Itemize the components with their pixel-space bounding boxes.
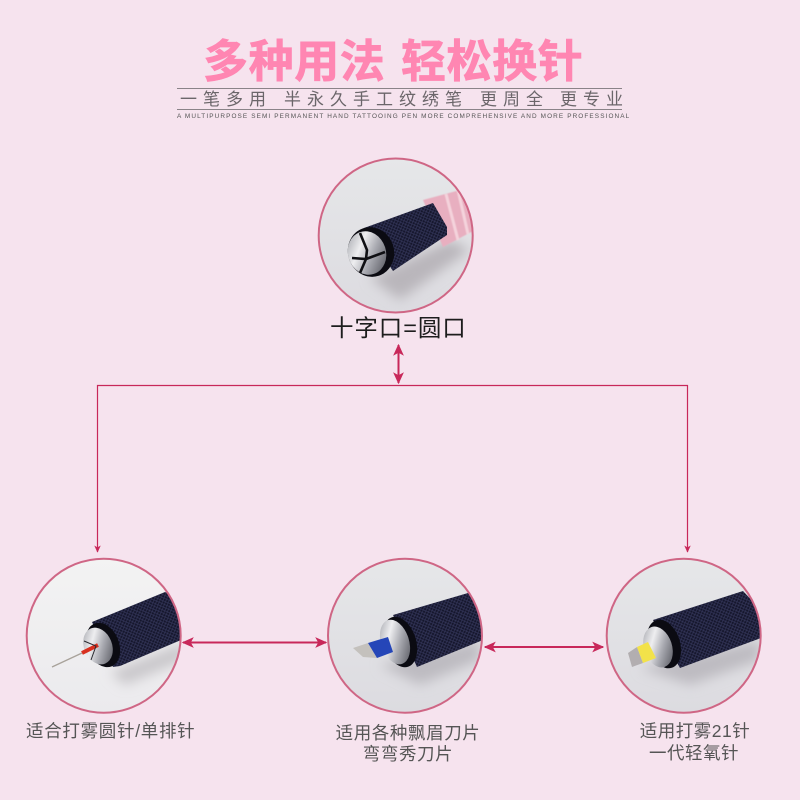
- branch lines to left and right: [98, 386, 688, 552]
- subtitle block: 更专业: [560, 90, 629, 109]
- title: 轻松换针: [401, 36, 583, 87]
- subtitle block: 一笔多用: [180, 90, 272, 109]
- caption: middle: 弯弯秀刀片: [363, 744, 453, 764]
- knurled black barrel: [364, 203, 447, 271]
- needle: [52, 653, 82, 667]
- title: 多种用法: [203, 36, 385, 87]
- caption: right: 一代轻氧针: [649, 743, 739, 763]
- label: cross = round: 十字口=圆口: [330, 315, 467, 341]
- pen shadow: [370, 240, 470, 300]
- subtitle block: [177, 88, 630, 120]
- pink barrel: [423, 190, 472, 247]
- yellow blade holder: [628, 647, 643, 667]
- cross-slotted steel head: [348, 231, 386, 275]
- caption: left: 适合打雾圆针/单排针: [26, 721, 195, 741]
- arrow: left to middle: [183, 642, 326, 644]
- photo circle: 21 pin needle: [607, 559, 761, 713]
- caption: middle: [336, 723, 480, 764]
- subtitle block: 更周全: [480, 90, 549, 109]
- blade: [353, 643, 377, 658]
- connector lines and arrows: [98, 345, 688, 647]
- subtitle block: 半永久手工纹绣笔: [284, 90, 468, 109]
- photo circle: blade: [328, 559, 483, 713]
- caption: middle: 适用各种飘眉刀片: [336, 723, 480, 743]
- black collar: [348, 227, 394, 277]
- photo circle: cross-shaped tip: [319, 158, 475, 312]
- arrow: middle to right: [485, 646, 603, 648]
- photo circle: round needle: [27, 559, 185, 713]
- caption: right: [640, 721, 750, 763]
- subtitle block: A MULTIPURPOSE SEMI PERMANENT HAND TATTOOING PEN MORE COMPREHENSIVE AND MORE PROFESSIONAL: [177, 113, 630, 120]
- arrow: vertical double: [398, 345, 400, 383]
- caption: right: 适用打雾21针: [640, 721, 750, 741]
